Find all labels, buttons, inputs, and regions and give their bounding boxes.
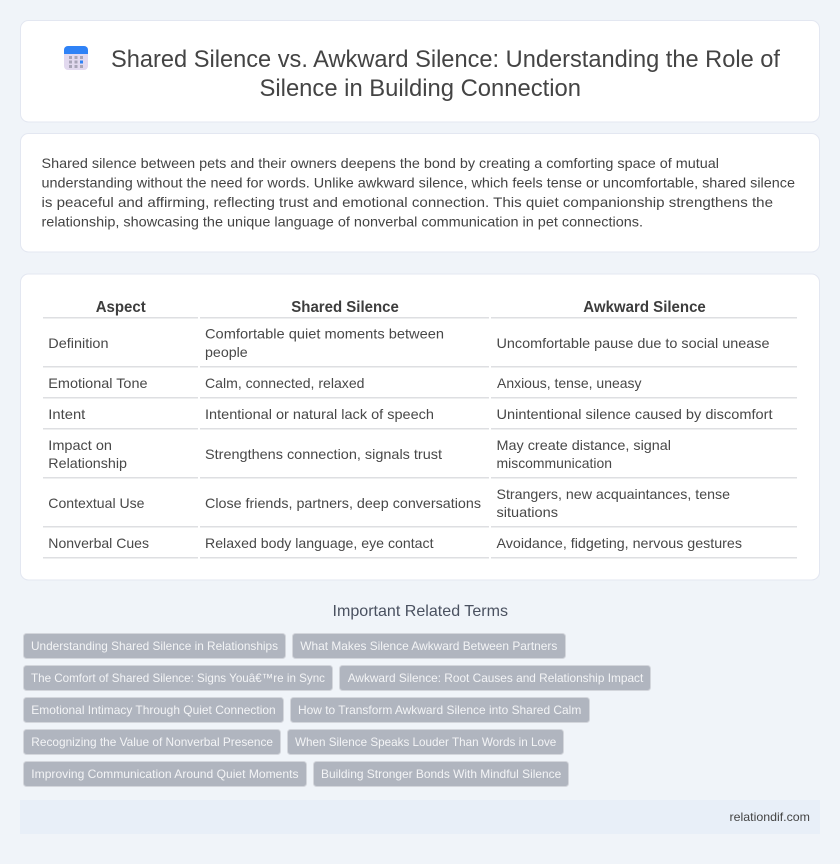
table header row: Awkward Silence: [583, 299, 706, 316]
table row: intent: Intent: [48, 406, 85, 422]
table row: contextual use: situations: [496, 504, 558, 520]
tag: Recognizing the Value of Nonverbal Presence: [31, 735, 273, 749]
table row: intent: Unintentional silence caused by discomfort: [496, 406, 773, 422]
tag: [24, 634, 286, 658]
title: [111, 46, 780, 102]
tag: Understanding Shared Silence in Relationships: [31, 639, 278, 653]
tag: Improving Communication Around Quiet Moments: [31, 767, 299, 781]
table row: contextual use: Strangers, new acquaintances, tense: [496, 486, 730, 502]
tag: [24, 730, 280, 754]
table row: definition: Definition: [48, 335, 108, 351]
tag: [288, 730, 564, 754]
table row: impact on relationship: miscommunication: [496, 455, 612, 471]
table row: impact on relationship: May create distance, signal: [496, 437, 671, 453]
table row: intent: [48, 406, 773, 422]
tag: How to Transform Awkward Silence into Shared Calm: [298, 703, 581, 717]
tag: [24, 666, 332, 690]
tag: [290, 698, 590, 722]
table header row: Shared Silence: [291, 299, 399, 316]
table row: definition: Uncomfortable pause due to social unease: [496, 335, 770, 351]
tag: [24, 698, 284, 722]
footer: [20, 800, 820, 834]
tag: When Silence Speaks Louder Than Words in Love: [295, 735, 557, 749]
table row: nonverbal cues: Relaxed body language, eye contact: [205, 535, 434, 551]
text block: introduction paragraph: is peaceful and affirming, reflecting trust and emotional connection. This quiet companionship strengthens the: [42, 194, 773, 210]
table row: emotional tone: Anxious, tense, uneasy: [497, 375, 642, 391]
table header row: Aspect: [96, 299, 146, 316]
tag: Awkward Silence: Root Causes and Relationship Impact: [348, 671, 644, 685]
tag: [340, 666, 650, 690]
table row: impact on relationship: [48, 437, 671, 471]
table row: contextual use: [48, 486, 730, 520]
heading: important related terms: Important Related Terms: [332, 603, 508, 620]
panel: comparison table: [20, 274, 820, 580]
title: Shared Silence vs. Awkward Silence: Understanding the Role of: [111, 46, 780, 73]
table row: nonverbal cues: [48, 535, 742, 551]
table row: impact on relationship: Impact on: [48, 437, 112, 453]
tag: [24, 762, 306, 786]
table row: definition: [48, 326, 770, 360]
table row: contextual use: Close friends, partners, deep conversations: [205, 495, 481, 511]
table row: emotional tone: [48, 375, 642, 391]
tag: [292, 634, 566, 658]
title: Silence in Building Connection: [260, 75, 581, 102]
table row: impact on relationship: Relationship: [48, 455, 127, 471]
footer: relationdif.com: [730, 810, 810, 824]
table row: intent: Intentional or natural lack of speech: [205, 406, 434, 422]
tag: What Makes Silence Awkward Between Partners: [300, 639, 557, 653]
table row: nonverbal cues: Nonverbal Cues: [48, 535, 149, 551]
table row: emotional tone: Emotional Tone: [48, 375, 148, 391]
table header row: [96, 299, 706, 316]
panel: related term tags: [24, 634, 650, 786]
tag: Emotional Intimacy Through Quiet Connection: [31, 703, 276, 717]
panel: header: [20, 20, 820, 122]
table row: contextual use: Contextual Use: [48, 495, 145, 511]
table row: nonverbal cues: Avoidance, fidgeting, nervous gestures: [496, 535, 742, 551]
table row: definition: Comfortable quiet moments between: [205, 326, 444, 342]
table row: definition: people: [205, 344, 248, 360]
text block: introduction paragraph: understanding without the need for words. Unlike awkward silence, which feels tense or uncomfortable, shared silence: [42, 174, 795, 190]
tag: [314, 762, 568, 786]
icon: calendar: [64, 46, 88, 70]
tag: The Comfort of Shared Silence: Signs Youâ€™re in Sync: [31, 671, 325, 685]
text block: introduction paragraph: [42, 155, 795, 230]
table row: emotional tone: Calm, connected, relaxed: [205, 375, 364, 391]
panel: introduction: [20, 134, 820, 252]
tag: Building Stronger Bonds With Mindful Silence: [321, 767, 562, 781]
text block: introduction paragraph: relationship, showcasing the unique language of nonverbal communication in pet connections.: [42, 214, 643, 230]
table row: impact on relationship: Strengthens connection, signals trust: [205, 446, 442, 462]
text block: introduction paragraph: Shared silence between pets and their owners deepens the bond by creating a comforting space of mutual: [42, 155, 719, 171]
